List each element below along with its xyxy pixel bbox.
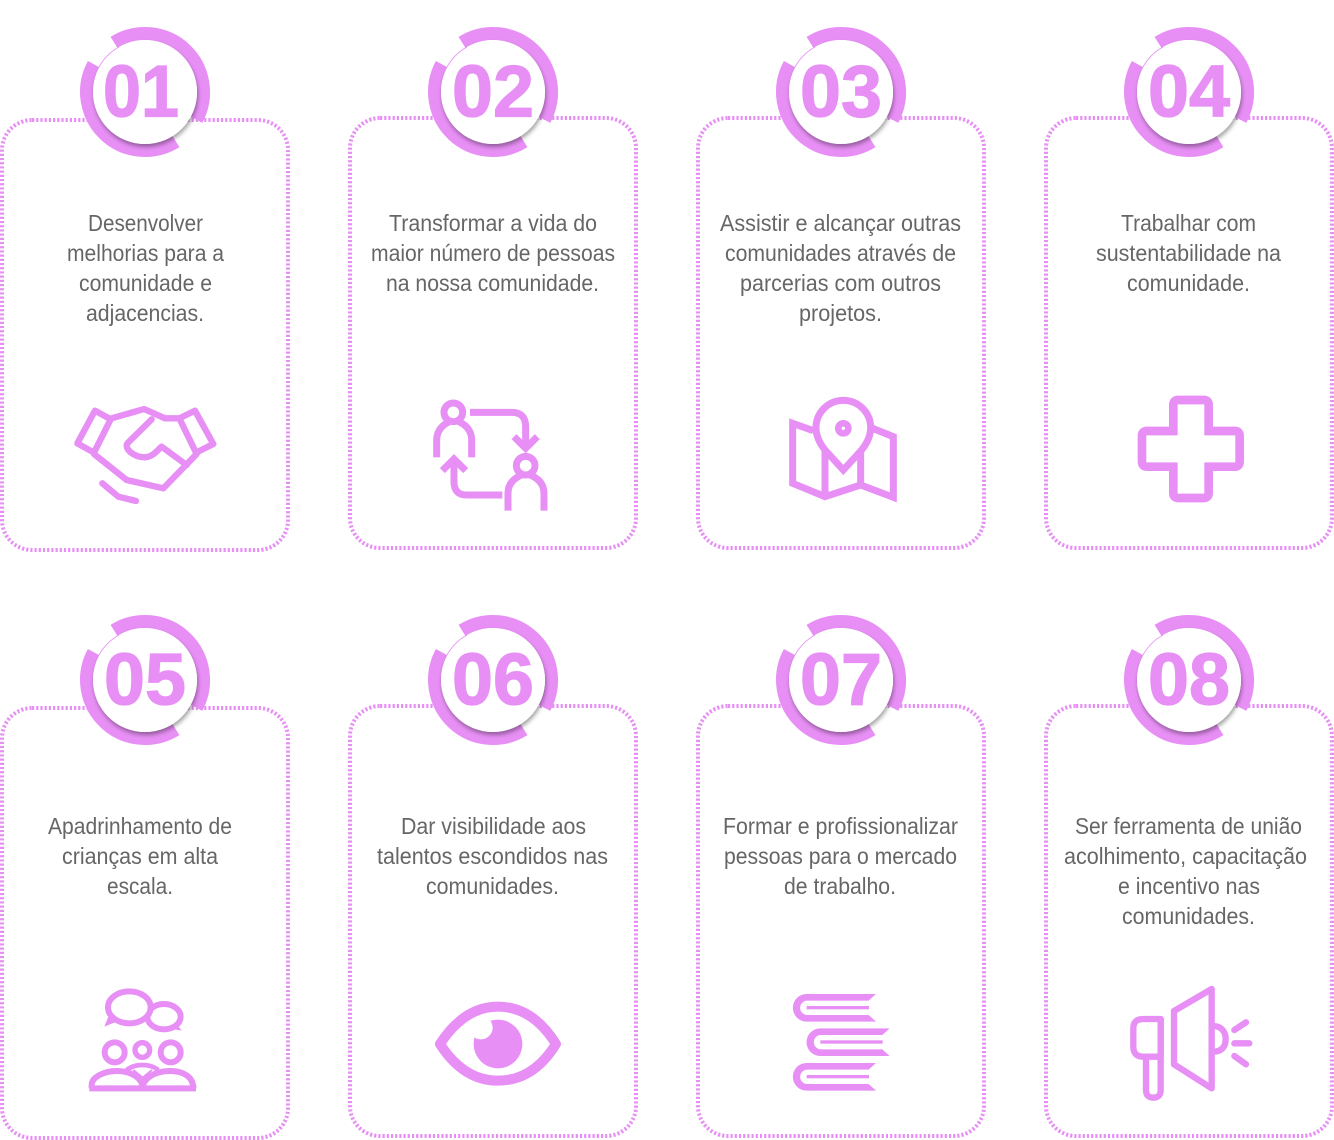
- icon: stack of books: [793, 994, 890, 1091]
- text: card 07: de trabalho.: [784, 873, 896, 899]
- text: card 03: projetos.: [799, 300, 882, 326]
- badge 04: 04: [1148, 52, 1230, 132]
- card 07 dotted border: [698, 706, 984, 1136]
- badge 03: [783, 33, 900, 150]
- card 02 dotted border: [350, 118, 636, 548]
- card 03 dotted border: [698, 118, 984, 548]
- text: card 08: comunidades.: [1122, 903, 1255, 929]
- text: card 06: Dar visibilidade aos: [401, 813, 586, 839]
- panel: card 08: [1046, 621, 1332, 1136]
- text: card 04: Trabalhar com: [1121, 210, 1256, 236]
- panel: card 06: [350, 621, 636, 1136]
- badge 07: 07: [800, 640, 882, 720]
- icon: handshake: [77, 409, 213, 501]
- icon: megaphone: [1133, 989, 1249, 1098]
- text: card 01: Desenvolver: [88, 210, 203, 236]
- icon: group conversation: [89, 991, 196, 1088]
- badge 05: [87, 621, 204, 738]
- panel: card 07: [698, 621, 984, 1136]
- panel: card 03: [698, 33, 984, 548]
- text: card 04: [1096, 210, 1282, 296]
- badge 02: 02: [452, 52, 534, 132]
- badge 08: [1131, 621, 1248, 738]
- icon: people exchange: [437, 403, 544, 511]
- card 04 dotted border: [1046, 118, 1332, 548]
- panel: card 05: [2, 621, 288, 1138]
- text: card 01: adjacencias.: [86, 300, 204, 326]
- badge 05: 05: [104, 640, 186, 720]
- text: card 02: na nossa comunidade.: [386, 270, 599, 296]
- text: card 05: [48, 813, 232, 899]
- text: card 08: [1064, 813, 1307, 929]
- text: card 04: sustentabilidade na: [1096, 240, 1282, 266]
- text: card 05: crianças em alta: [62, 843, 219, 869]
- text: card 08: e incentivo nas: [1118, 873, 1260, 899]
- text: card 05: escala.: [107, 873, 173, 899]
- text: card 04: comunidade.: [1127, 270, 1250, 296]
- text: card 07: [723, 813, 958, 899]
- panel: card 04: [1046, 33, 1332, 548]
- text: card 02: [371, 210, 615, 296]
- text: card 02: Transformar a vida do: [389, 210, 597, 236]
- badge 04: [1131, 33, 1248, 150]
- badge 01: 01: [103, 52, 179, 132]
- card 06 dotted border: [350, 706, 636, 1136]
- text: card 07: pessoas para o mercado: [724, 843, 957, 869]
- badge 01: [87, 33, 204, 150]
- badge 07: [783, 621, 900, 738]
- card 01 dotted border: [2, 120, 288, 550]
- badge 03: 03: [800, 52, 882, 132]
- icon: eye: [440, 1007, 556, 1081]
- text: card 07: Formar e profissionalizar: [723, 813, 958, 839]
- text: card 03: [720, 210, 961, 326]
- icon: map with pin: [793, 400, 893, 497]
- text: card 06: talentos escondidos nas: [377, 843, 608, 869]
- text: card 06: comunidades.: [426, 873, 559, 899]
- text: card 03: Assistir e alcançar outras: [720, 210, 961, 236]
- icon: plus cross: [1142, 400, 1240, 498]
- badge 06: [435, 621, 552, 738]
- text: card 01: [67, 210, 225, 326]
- badge 02: [435, 33, 552, 150]
- text: card 01: melhorias para a: [67, 240, 225, 266]
- text: card 08: Ser ferramenta de união: [1075, 813, 1302, 839]
- card 08 dotted border: [1046, 706, 1332, 1136]
- text: card 03: comunidades através de: [725, 240, 956, 266]
- card 05 dotted border: [2, 708, 288, 1138]
- text: card 01: comunidade e: [79, 270, 212, 296]
- badge 06: 06: [452, 640, 534, 720]
- text: card 02: maior número de pessoas: [371, 240, 615, 266]
- panel: card 01: [2, 33, 288, 550]
- text: card 06: [377, 813, 608, 899]
- text: card 08: acolhimento, capacitação: [1064, 843, 1307, 869]
- badge 08: 08: [1148, 640, 1230, 720]
- text: card 05: Apadrinhamento de: [48, 813, 232, 839]
- panel: card 02: [350, 33, 636, 548]
- text: card 03: parcerias com outros: [740, 270, 941, 296]
